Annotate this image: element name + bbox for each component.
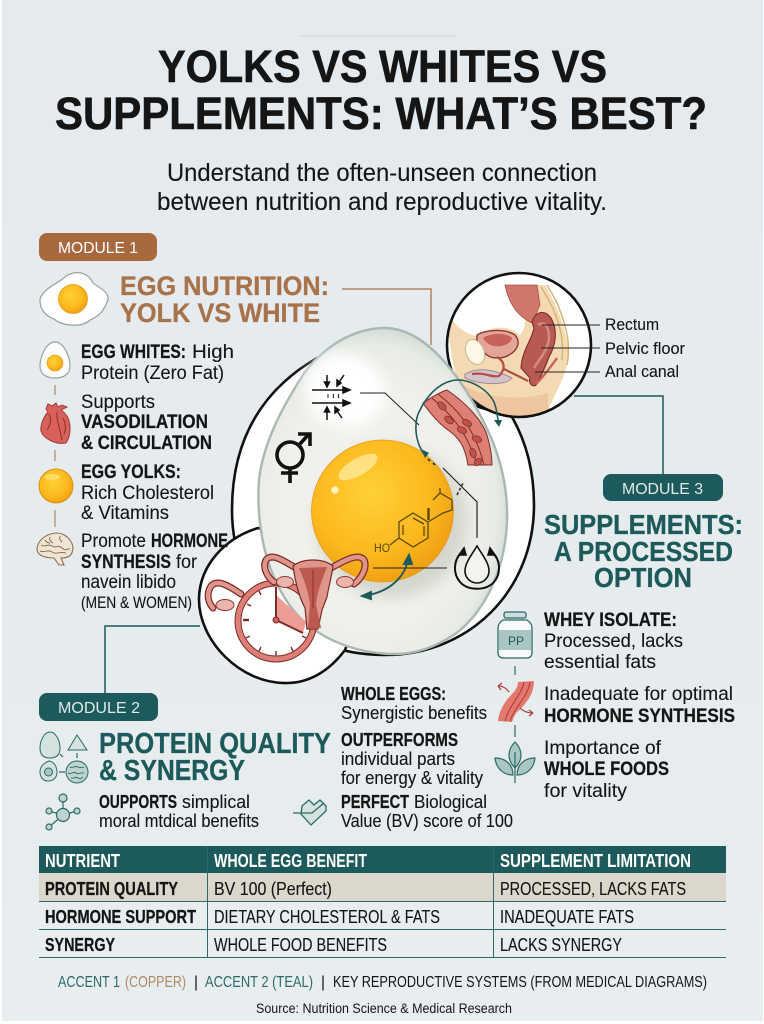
heading: supplements [544,509,743,593]
connector: module 2 [105,626,200,693]
legend: ACCENT 1 [58,974,120,991]
text: vasodilation: & CIRCULATION [81,432,212,454]
legend: ACCENT 2 (TEAL) [205,974,313,991]
text: perfect biological value [341,792,513,831]
egg white [258,328,507,654]
pointer line: arrows to vessel [360,393,419,425]
table header: SUPPLEMENT LIMITATION [500,851,691,871]
text: supports [99,792,259,831]
text: hormone inadequate: HORMONE SYNTHESIS [544,705,735,727]
comparison table [39,846,726,958]
badge: module 3 [603,474,723,501]
pointer line: yolk to drop [443,468,477,538]
text: hormone synthesis: Promote [81,530,146,552]
heading: supplements: SUPPLEMENTS: [544,509,743,540]
connector: module 3 [574,396,663,474]
text: perfect biological value: Value (BV) score of 100 [341,811,513,831]
icon: molecule [46,794,80,830]
subtitle: Understand the often-unseen connection [167,159,597,187]
text: egg yolks: Rich Cholesterol [81,482,214,504]
subtitle [157,159,607,216]
connector: module 1 to egg [342,289,431,345]
badge: module 3: MODULE 3 [622,481,703,498]
text: whole foods [544,737,669,802]
labels: pelvic anatomy [535,315,685,381]
text: egg whites: EGG WHITES: [81,341,186,363]
text: whole foods: WHOLE FOODS [544,758,669,780]
row: hormone support: HORMONE SUPPORT [45,907,196,927]
text: hormone synthesis: navein libido [81,571,176,593]
text: hormone synthesis: (MEN & WOMEN) [81,593,192,612]
text: whey isolate: WHEY ISOLATE: [544,609,677,631]
text: perfect biological value: PERFECT [341,792,409,812]
yolk [312,440,454,582]
row: synergy: WHOLE FOOD BENEFITS [214,935,387,955]
badge: module 2: MODULE 2 [58,700,140,717]
icons: whole foods cluster [40,732,88,783]
heading: protein quality [99,728,331,787]
text: perfect biological value: Biological [414,792,487,812]
row: synergy: LACKS SYNERGY [500,935,622,955]
connector dashes: right column [514,666,516,737]
text: vasodilation [81,391,212,454]
icon: uterus [265,557,365,629]
text: egg whites: Protein (Zero Fat) [81,362,224,384]
title: YOLKS VS WHITES VS [158,41,607,92]
text: outperforms: individual parts [341,749,455,769]
heading: egg nutrition: EGG NUTRITION: [120,271,329,301]
icon: ovary and tube [208,583,241,610]
heading: protein quality: & SYNERGY [99,755,245,787]
text: hormone synthesis [81,530,228,612]
icon: compression arrows [312,375,350,420]
icon: heart [41,403,70,443]
badge: module 1 [39,233,157,261]
anatomical circle: pelvic diagram [447,273,591,420]
icon: teal circulation arc [416,380,502,465]
heading: supplements: OPTION [594,562,692,593]
table header: NUTRIENT [45,851,120,871]
labels: pelvic anatomy: Rectum [605,315,659,334]
text: whole foods: Importance of [544,737,662,759]
table header [39,846,726,873]
row: hormone support: DIETARY CHOLESTEROL & FATS [214,907,440,927]
row: protein quality: PROCESSED, LACKS FATS [500,879,686,899]
text: hormone synthesis: for [176,551,197,573]
labels: pelvic anatomy: Anal canal [605,362,679,381]
text: egg whites: High [192,341,234,363]
text: hormone inadequate: Inadequate for optimal [544,683,733,705]
row: protein quality [39,873,726,901]
title: SUPPLEMENTS: WHAT’S BEST? [55,88,707,139]
icon: check chevron [293,800,326,825]
text: whey isolate: Processed, lacks [544,630,683,652]
text: egg yolks [81,461,214,524]
legend: | [194,974,198,991]
text: vasodilation: Supports [81,391,155,413]
connector dashes: left column [54,385,56,527]
icon: supplement jar: PP [508,634,524,648]
heading: egg nutrition: YOLK VS WHITE [120,298,320,328]
heading: protein quality: PROTEIN QUALITY [99,728,331,760]
source note: Source: Nutrition Science & Medical Research [256,1001,512,1016]
icon: fried egg [40,273,108,325]
text: outperforms [341,730,483,788]
icon: clock [238,583,314,659]
badge: module 1: MODULE 1 [58,240,138,257]
row: hormone support: INADEQUATE FATS [500,907,634,927]
labels: pelvic anatomy: Pelvic floor [605,339,685,358]
subtitle: between nutrition and reproductive vitality. [157,188,607,216]
icon: egg white [40,342,70,378]
icon: gender symbol [277,434,310,483]
row: synergy [45,935,622,955]
row: protein quality: PROTEIN QUALITY [45,879,178,899]
text: outperforms: for energy & vitality [341,768,483,788]
text: supports: moral mtdical benefits [99,811,259,831]
icon: plant leaves [495,742,535,783]
text: egg yolks: EGG YOLKS: [81,461,181,483]
table header: WHOLE EGG BENEFIT [214,851,367,871]
heading: supplements: A PROCESSED [554,536,733,567]
text: whey isolate [544,609,683,673]
row: hormone support [45,907,634,927]
legend: (COPPER) [125,974,186,991]
text: hormone synthesis: SYNTHESIS [81,551,171,573]
icon: supplement jar [498,612,532,658]
icon: curved teal arrow [362,555,412,599]
icon: blood vessel [423,390,492,467]
central egg illustration [199,273,591,683]
hormone molecule [374,483,463,555]
title [55,41,707,139]
text: supports: OUPPORTS [99,792,177,812]
badge: module 2 [39,693,158,721]
text: whole eggs: Synergistic benefits [341,703,487,723]
row: protein quality: BV 100 (Perfect) [214,879,332,899]
icon: brain [37,533,73,565]
text: hormone synthesis: HORMONE [151,530,228,552]
icon: water drop cycle [455,546,499,589]
text: vasodilation: VASODILATION [81,411,208,433]
text: whole eggs: WHOLE EGGS: [341,684,446,704]
legend [58,974,707,991]
text: outperforms: OUTPERFORMS [341,730,458,750]
icon: muscle fibre [498,681,534,722]
row: synergy: SYNERGY [45,935,115,955]
heading: egg nutrition [120,271,329,328]
text: whole eggs [341,684,487,723]
text: hormone inadequate [544,683,735,727]
text: egg whites [81,341,234,384]
text: whole foods: for vitality [544,780,627,802]
icon: yolk [39,469,73,503]
outer white outline shape [232,358,534,655]
hormone molecule: HO [374,543,390,555]
text: supports: simplical [182,792,250,812]
text: egg yolks: & Vitamins [81,502,169,524]
text: whey isolate: essential fats [544,651,656,673]
lower left circle [199,528,380,683]
legend: | [321,974,325,991]
